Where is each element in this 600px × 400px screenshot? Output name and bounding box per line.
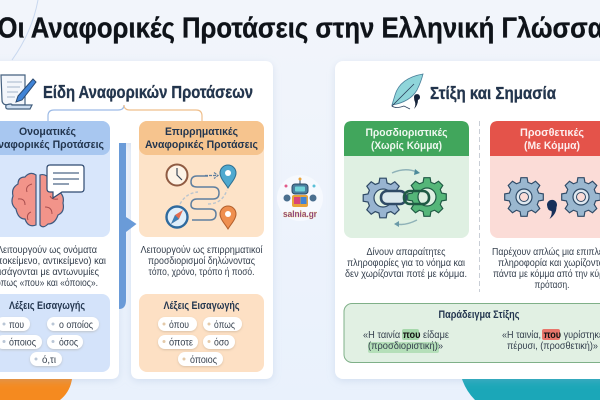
panel: nominal intro words: Λέξεις Εισαγωγής <box>9 300 85 312</box>
panel: nominal intro words: που <box>9 320 24 331</box>
text: adverbial description: τόπο, χρόνο, τρόπο ή ποσό. <box>148 266 254 278</box>
panel: nominal intro words: όσος <box>59 336 78 348</box>
panel: punctuation example: (προσδιοριστική)» <box>368 340 443 352</box>
text: nominal description <box>0 244 107 289</box>
panel: adverbial intro words: όποιος <box>190 354 217 366</box>
text: restrictive description <box>345 246 467 280</box>
panel: nominal intro words <box>0 294 110 372</box>
panel: adverbial intro words: Λέξεις Εισαγωγής <box>164 300 240 312</box>
decorative teal blob <box>462 379 600 400</box>
text: non-restrictive description: πρόταση. <box>534 279 570 291</box>
column: restrictive header <box>344 121 469 156</box>
panel: adverbial intro words: όπως <box>214 319 235 331</box>
column: restrictive header: (Χωρίς Κόμμα) <box>371 140 442 152</box>
text: adverbial description: Λειτουργούν ως επιρρηματικοί <box>140 244 263 256</box>
panel: adverbial intro words <box>139 294 264 372</box>
decorative thin line <box>12 0 38 60</box>
icon: feather and comma <box>392 74 423 109</box>
icon: brain with speech bubble <box>12 165 84 227</box>
column: nominal header <box>0 121 110 155</box>
column: non-restrictive header: (Με Κόμμα) <box>524 140 580 152</box>
column: non-restrictive header <box>490 121 600 156</box>
panel: punctuation and meaning <box>335 61 600 379</box>
text: restrictive description: πληροφορίες για το νόημα και <box>347 257 466 269</box>
panel: adverbial intro words: όσο <box>214 336 229 348</box>
column: non-restrictive header: Προσθετικές <box>520 127 584 139</box>
column: non-restrictive body <box>490 121 600 238</box>
column: restrictive body <box>344 121 469 238</box>
column: adverbial header <box>139 121 264 155</box>
logo: robot <box>277 175 323 221</box>
column: nominal body <box>0 121 110 237</box>
text: adverbial description: προσδιορισμοί δηλώνοντας <box>148 255 255 267</box>
icon: scroll and pen <box>1 75 36 109</box>
heading: punctuation: Στίξη και Σημασία <box>430 83 556 104</box>
panel: nominal intro words: ό,τι <box>42 354 56 366</box>
dashed divider <box>478 121 480 292</box>
connector orange <box>124 105 202 121</box>
text: adverbial description <box>140 244 263 278</box>
panel background <box>0 61 273 379</box>
blue divider arrow <box>119 143 136 309</box>
column: adverbial header: Αναφορικές Προτάσεις <box>145 139 258 151</box>
text: restrictive description: δεν χωρίζονται ποτέ με κόμμα. <box>345 268 467 280</box>
icon: linked gears <box>363 169 446 227</box>
panel: nominal intro words: όποιος <box>9 336 36 348</box>
column: adverbial body <box>139 121 264 237</box>
column: restrictive header: Προσδιοριστικές <box>366 127 448 139</box>
column: adverbial header: Επιρρηματικές <box>165 126 238 138</box>
panel: adverbial intro words: όπου <box>169 319 189 331</box>
panel: punctuation example: «Η ταινία που είδαμε <box>363 329 449 341</box>
panel: types of relative clauses <box>0 61 273 379</box>
white right column cover <box>131 143 273 300</box>
panel: nominal intro words: ο οποίος <box>59 319 93 331</box>
column: nominal header: Ονοματικές <box>19 126 76 138</box>
decorative orange blob <box>0 379 72 400</box>
heading: types: Είδη Αναφορικών Προτάσεων <box>43 82 253 102</box>
blue arrow tip <box>126 217 136 232</box>
icon: gears separated by comma <box>505 178 600 219</box>
logo: robot: salnia.gr <box>283 209 317 219</box>
panel: punctuation example <box>344 304 600 362</box>
panel background <box>335 61 600 379</box>
icon: clock, compass, route and pins <box>166 164 236 229</box>
text: nominal description: Λειτουργούν ως ονόματα <box>0 244 97 256</box>
panel: punctuation example: Παράδειγμα Στίξης <box>438 309 520 321</box>
text: restrictive description: Δίνουν απαραίτητες <box>366 246 446 258</box>
panel: adverbial intro words: όποτε <box>169 336 193 348</box>
connector blue <box>48 105 124 121</box>
text: non-restrictive description <box>492 246 600 291</box>
